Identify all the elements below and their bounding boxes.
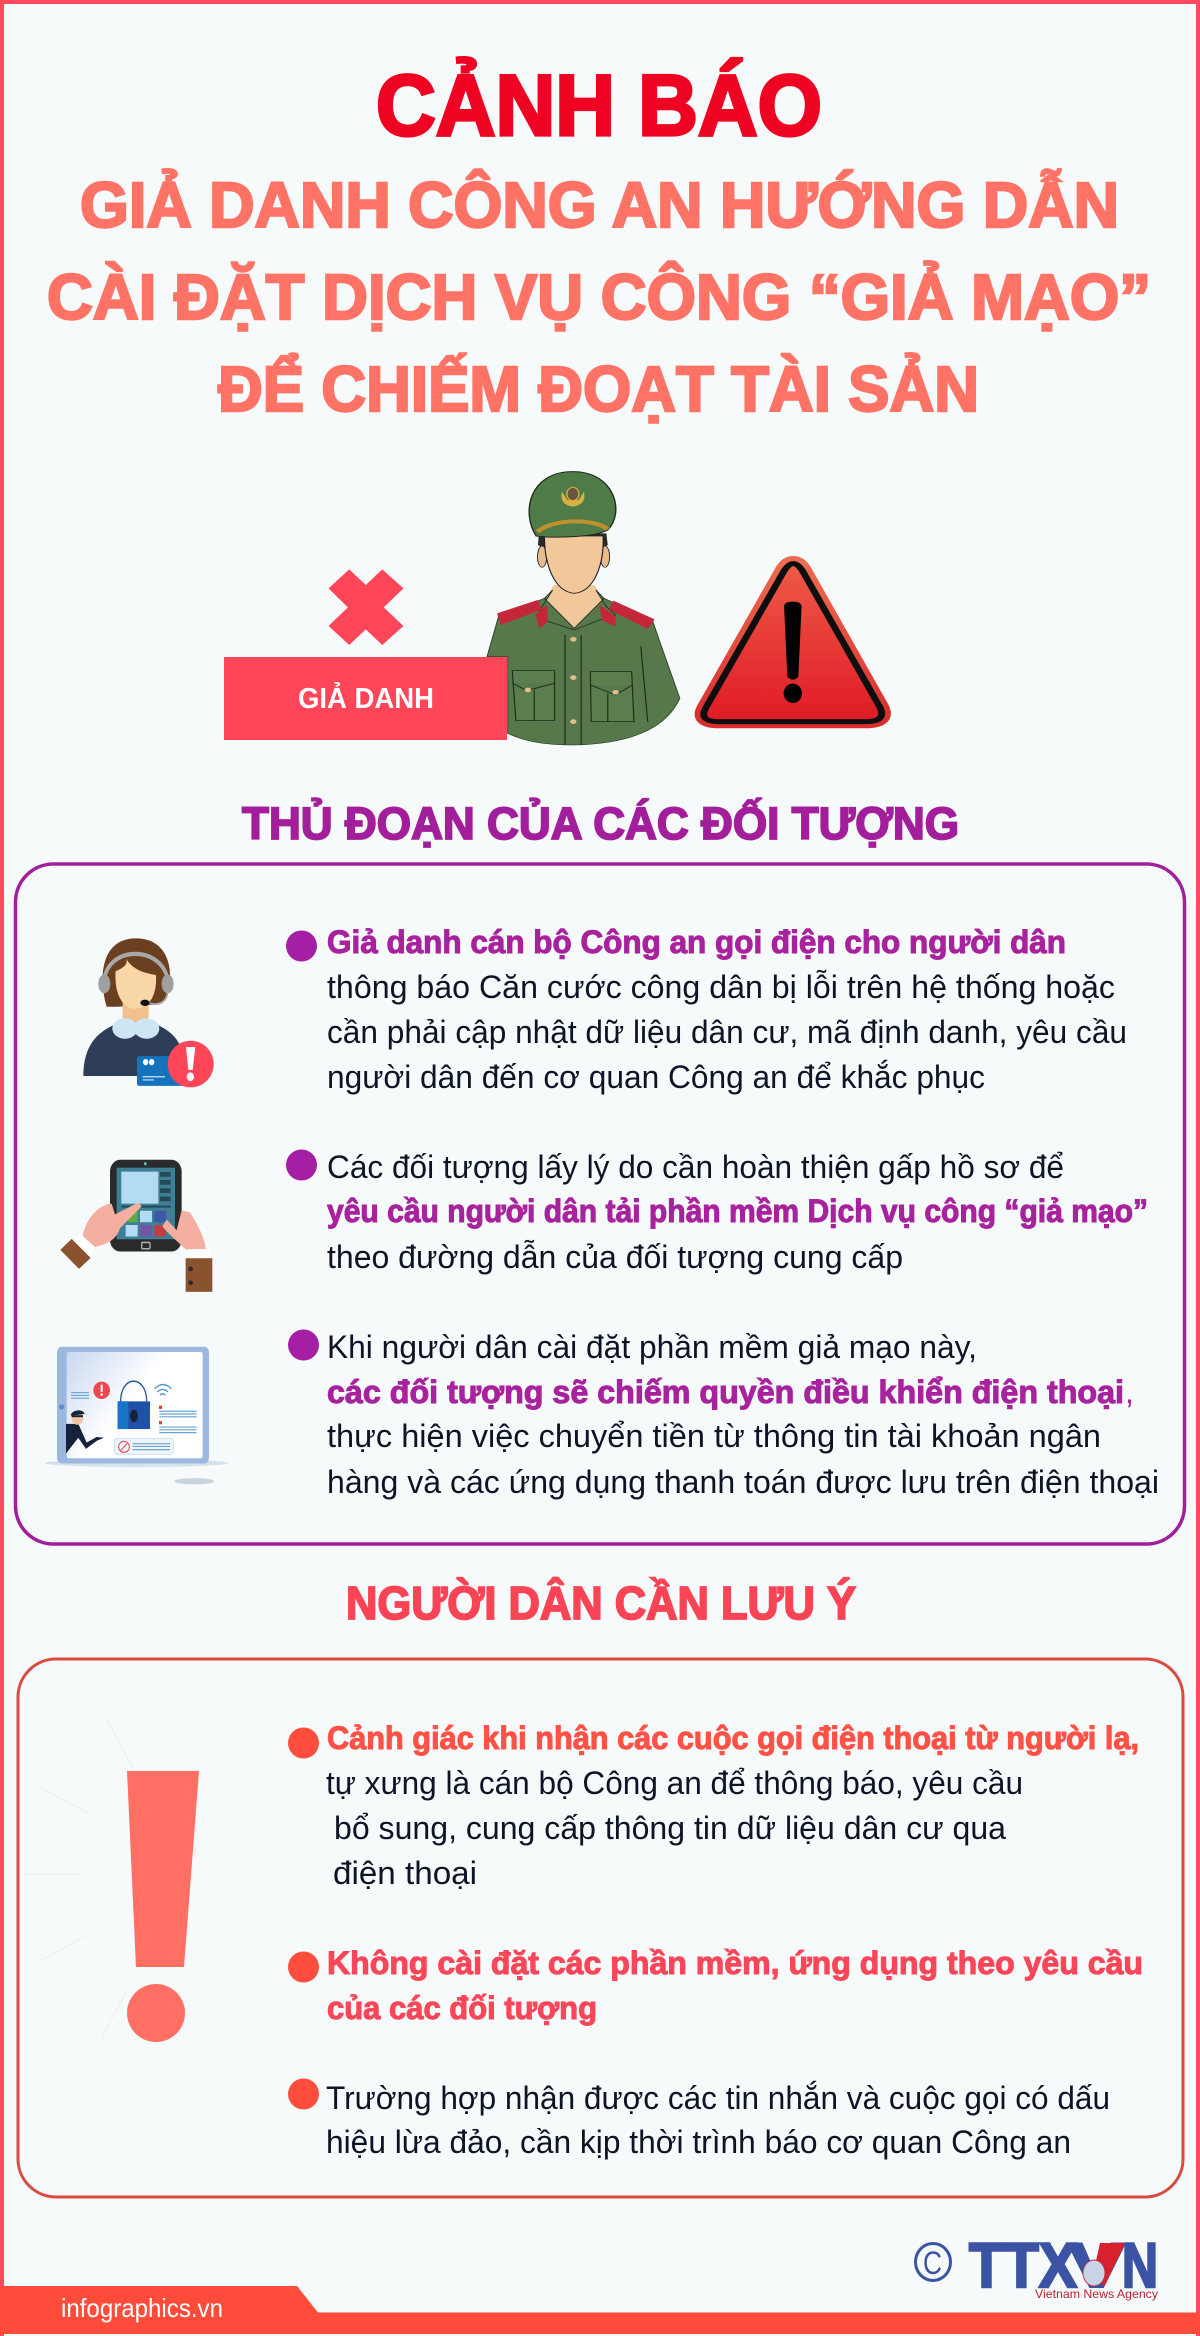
- subtitle: GIẢ DANH CÔNG AN HƯỚNG DẪN: [80, 168, 1119, 241]
- title: CẢNH BÁO: CẢNH BÁO: [376, 58, 822, 154]
- advice 2: của các đối tượng: [327, 1990, 597, 2026]
- bullet 1 and text: cần phải cập nhật dữ liệu dân cư, mã định danh, yêu cầu: [327, 1014, 1127, 1050]
- footer bar: infographics.vn: [61, 2293, 223, 2323]
- bullet 1 and text: người dân đến cơ quan Công an để khắc phục: [327, 1059, 985, 1095]
- label box: GIẢ DANH: GIẢ DANH: [298, 681, 434, 715]
- advice 2: [288, 1945, 1143, 2026]
- bullet 3 and text: ,: [1125, 1374, 1134, 1410]
- logo: TTXVN: [916, 2231, 1158, 2301]
- logo: TTXVN: C: [923, 2245, 942, 2281]
- advice 1: Cảnh giác khi nhận các cuộc gọi điện thoại từ người lạ,: [327, 1720, 1139, 1756]
- heading: THỦ ĐOẠN CỦA CÁC ĐỐI TƯỢNG: THỦ ĐOẠN CỦA CÁC ĐỐI TƯỢNG: [242, 798, 959, 849]
- advice 1: tự xưng là cán bộ Công an để thông báo, yêu cầu: [326, 1765, 1023, 1801]
- subtitle: CÀI ĐẶT DỊCH VỤ CÔNG “GIẢ MẠO”: [47, 260, 1151, 333]
- advice 1: điện thoại: [333, 1855, 477, 1891]
- bullet 2 and text: [286, 1149, 1148, 1275]
- subtitle: ĐỂ CHIẾM ĐOẠT TÀI SẢN: [218, 352, 979, 425]
- logo: TTXVN: V: [1068, 2231, 1125, 2301]
- bullet 2 and text: yêu cầu người dân tải phần mềm Dịch vụ công “giả mạo”: [327, 1193, 1148, 1229]
- advice 2: Không cài đặt các phần mềm, ứng dụng theo yêu cầu: [327, 1945, 1143, 1981]
- advice 1: [288, 1720, 1139, 1891]
- icon: call-centre woman with ID card alert: [83, 938, 214, 1087]
- logo: TTXVN: Vietnam News Agency: [1035, 2287, 1158, 2301]
- bullet 3 and text: thực hiện việc chuyển tiền từ thông tin tài khoản ngân: [327, 1418, 1101, 1454]
- footer bar: [0, 2286, 1200, 2334]
- logo: TTXVN: N: [1122, 2231, 1158, 2301]
- icon: warning triangle: [704, 562, 882, 722]
- bullet 2 and text: Các đối tượng lấy lý do cần hoàn thiện gấp hồ sơ để: [327, 1149, 1064, 1185]
- advice 3: hiệu lừa đảo, cần kịp thời trình báo cơ quan Công an: [326, 2124, 1071, 2160]
- label box: GIẢ DANH: [224, 657, 507, 740]
- icon: hacked device with padlock: [45, 1347, 229, 1484]
- bullet 3 and text: Khi người dân cài đặt phần mềm giả mạo này,: [327, 1329, 977, 1365]
- icon: large exclamation mark: [24, 1720, 199, 2042]
- subtitle: [47, 168, 1151, 425]
- heading: NGƯỜI DÂN CẦN LƯU Ý: NGƯỜI DÂN CẦN LƯU Ý: [346, 1577, 856, 1629]
- advice 3: Trường hợp nhận được các tin nhắn và cuộc gọi có dấu: [326, 2080, 1110, 2116]
- icon: hands holding tablet: [60, 1160, 212, 1292]
- bullet 2 and text: theo đường dẫn của đối tượng cung cấp: [327, 1239, 903, 1275]
- bullet 1 and text: Giả danh cán bộ Công an gọi điện cho người dân: [327, 924, 1066, 960]
- icon: red X mark: [329, 569, 403, 645]
- icon: police officer: [487, 472, 680, 745]
- bullet 3 and text: [288, 1329, 1159, 1500]
- advice 1: bổ sung, cung cấp thông tin dữ liệu dân cư qua: [334, 1810, 1006, 1846]
- advice 3: [288, 2078, 1110, 2160]
- bullet 3 and text: hàng và các ứng dụng thanh toán được lưu trên điện thoại: [327, 1464, 1159, 1500]
- panel: advice: [18, 1659, 1183, 2197]
- bullet 3 and text: các đối tượng sẽ chiếm quyền điều khiển điện thoại: [327, 1374, 1124, 1410]
- bullet 1 and text: [286, 924, 1127, 1095]
- bullet 1 and text: thông báo Căn cước công dân bị lỗi trên hệ thống hoặc: [327, 969, 1115, 1005]
- panel: tactics: [16, 864, 1184, 1544]
- logo: TTXVN: TTX: [969, 2231, 1077, 2301]
